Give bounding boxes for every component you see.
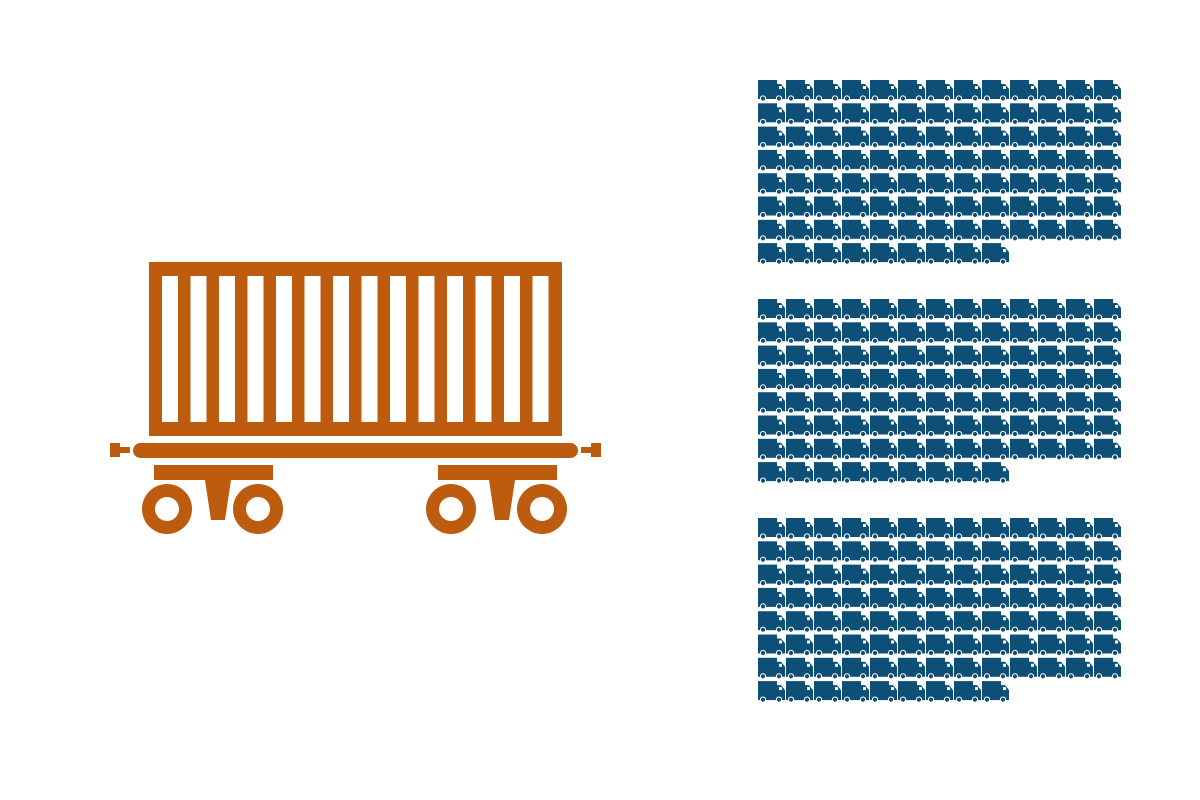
container [149, 262, 562, 436]
right wheel set [426, 465, 567, 534]
left wheel set [142, 465, 283, 534]
chassis beam with couplers [110, 443, 601, 458]
truck grid block 3 [758, 518, 1121, 702]
truck grid block 2 [758, 299, 1121, 483]
truck grid block 1 [758, 80, 1121, 264]
icon: rail freight car [110, 262, 601, 534]
